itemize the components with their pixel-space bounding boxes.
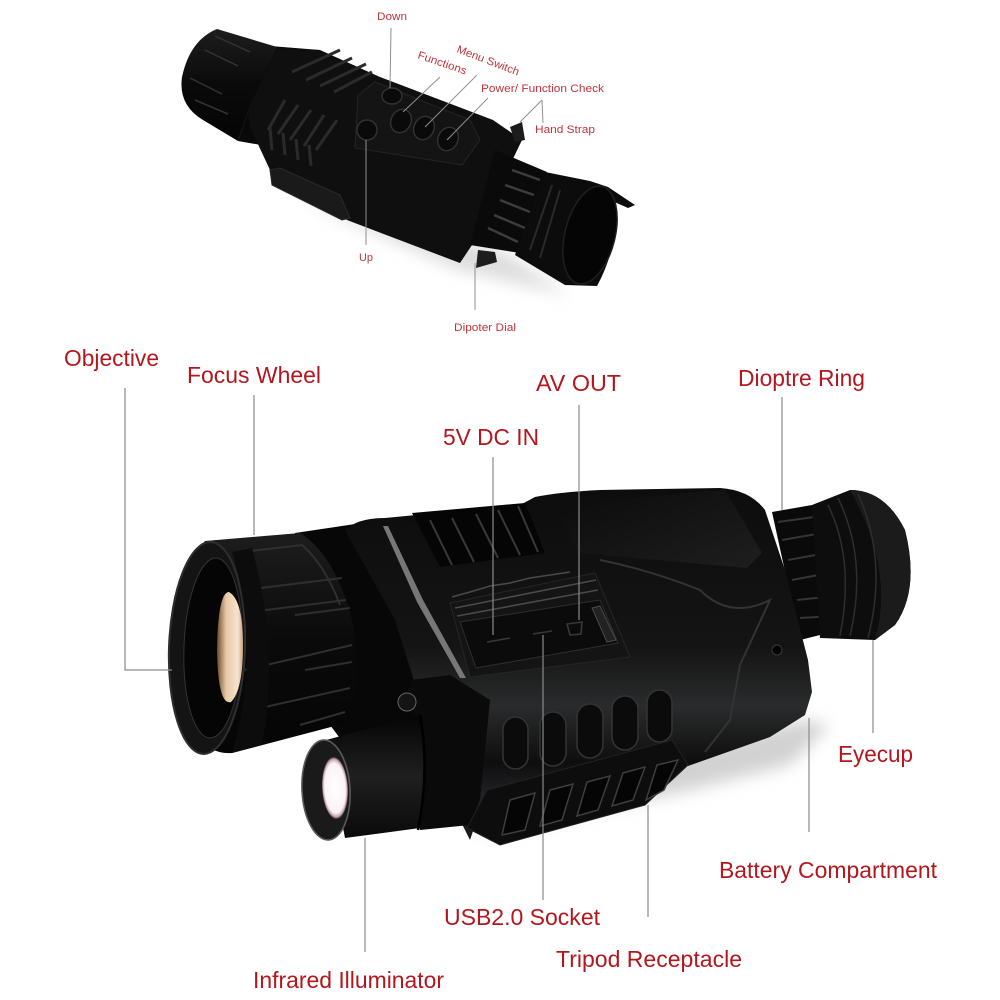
eyepiece — [772, 490, 911, 640]
shadow: main device — [480, 720, 830, 835]
wheel front edge — [232, 548, 269, 753]
eyecup — [515, 172, 635, 290]
shadow: top device — [300, 200, 570, 295]
main labels — [64, 345, 938, 993]
lens — [217, 592, 243, 702]
port marks — [487, 622, 582, 642]
illuminator mount — [410, 675, 490, 830]
label: menu switch: Menu Switch — [455, 44, 521, 78]
illuminator barrel — [326, 715, 424, 838]
label: infrared illuminator: Infrared Illuminator — [253, 967, 444, 993]
main monocular — [165, 488, 911, 845]
top labels — [359, 11, 605, 334]
focus wheel — [169, 533, 357, 753]
tripod rail — [467, 740, 688, 845]
label: functions: Functions — [416, 49, 469, 78]
illuminator lens — [320, 756, 350, 820]
illuminator rim — [299, 739, 353, 841]
label: focus wheel: Focus Wheel — [187, 362, 321, 388]
button panel — [355, 82, 480, 165]
main body — [345, 488, 812, 840]
label: eyecup: Eyecup — [838, 741, 913, 767]
label: 5v dc in: 5V DC IN — [443, 424, 539, 450]
buttons — [357, 88, 462, 154]
dioptre ring — [772, 505, 838, 640]
body contour — [600, 560, 770, 752]
usb panel — [450, 572, 630, 677]
label: down: Down — [377, 11, 407, 23]
objective assembly — [165, 533, 357, 755]
top inlay — [555, 490, 762, 568]
screw — [398, 693, 416, 711]
objective inner — [181, 557, 245, 739]
label: dioptre ring: Dioptre Ring — [738, 365, 865, 391]
grip pills — [503, 690, 672, 769]
eyepiece side button — [772, 645, 782, 655]
label: av out: AV OUT — [536, 370, 621, 396]
top callout lines — [366, 28, 543, 310]
edge highlight strip — [383, 526, 466, 678]
cover latch — [592, 606, 616, 642]
lower panel — [270, 168, 350, 220]
hand strap lug — [510, 122, 525, 142]
dioptre ring — [470, 150, 547, 253]
label: usb socket: USB2.0 Socket — [444, 904, 601, 930]
label: power function check: Power/ Function Check — [481, 83, 605, 95]
illuminator — [299, 675, 490, 841]
main body — [248, 48, 522, 263]
label: dipoter dial: Dipoter Dial — [454, 322, 516, 334]
dial — [476, 250, 497, 268]
objective rim — [165, 541, 249, 755]
objective neck — [295, 518, 430, 745]
objective neck top — [238, 46, 320, 150]
label: objective: Objective — [64, 345, 159, 371]
grip fins — [268, 50, 372, 166]
label: hand strap: Hand Strap — [535, 124, 595, 136]
main callout lines — [125, 388, 873, 952]
objective wheel — [181, 29, 277, 141]
label: battery compartment: Battery Compartment — [719, 857, 938, 883]
label: tripod receptacle: Tripod Receptacle — [556, 946, 742, 972]
eyecup — [812, 490, 911, 640]
usb cover — [460, 600, 618, 668]
top view monocular — [181, 29, 635, 295]
label: up: Up — [359, 252, 373, 264]
top fin block — [412, 503, 545, 567]
